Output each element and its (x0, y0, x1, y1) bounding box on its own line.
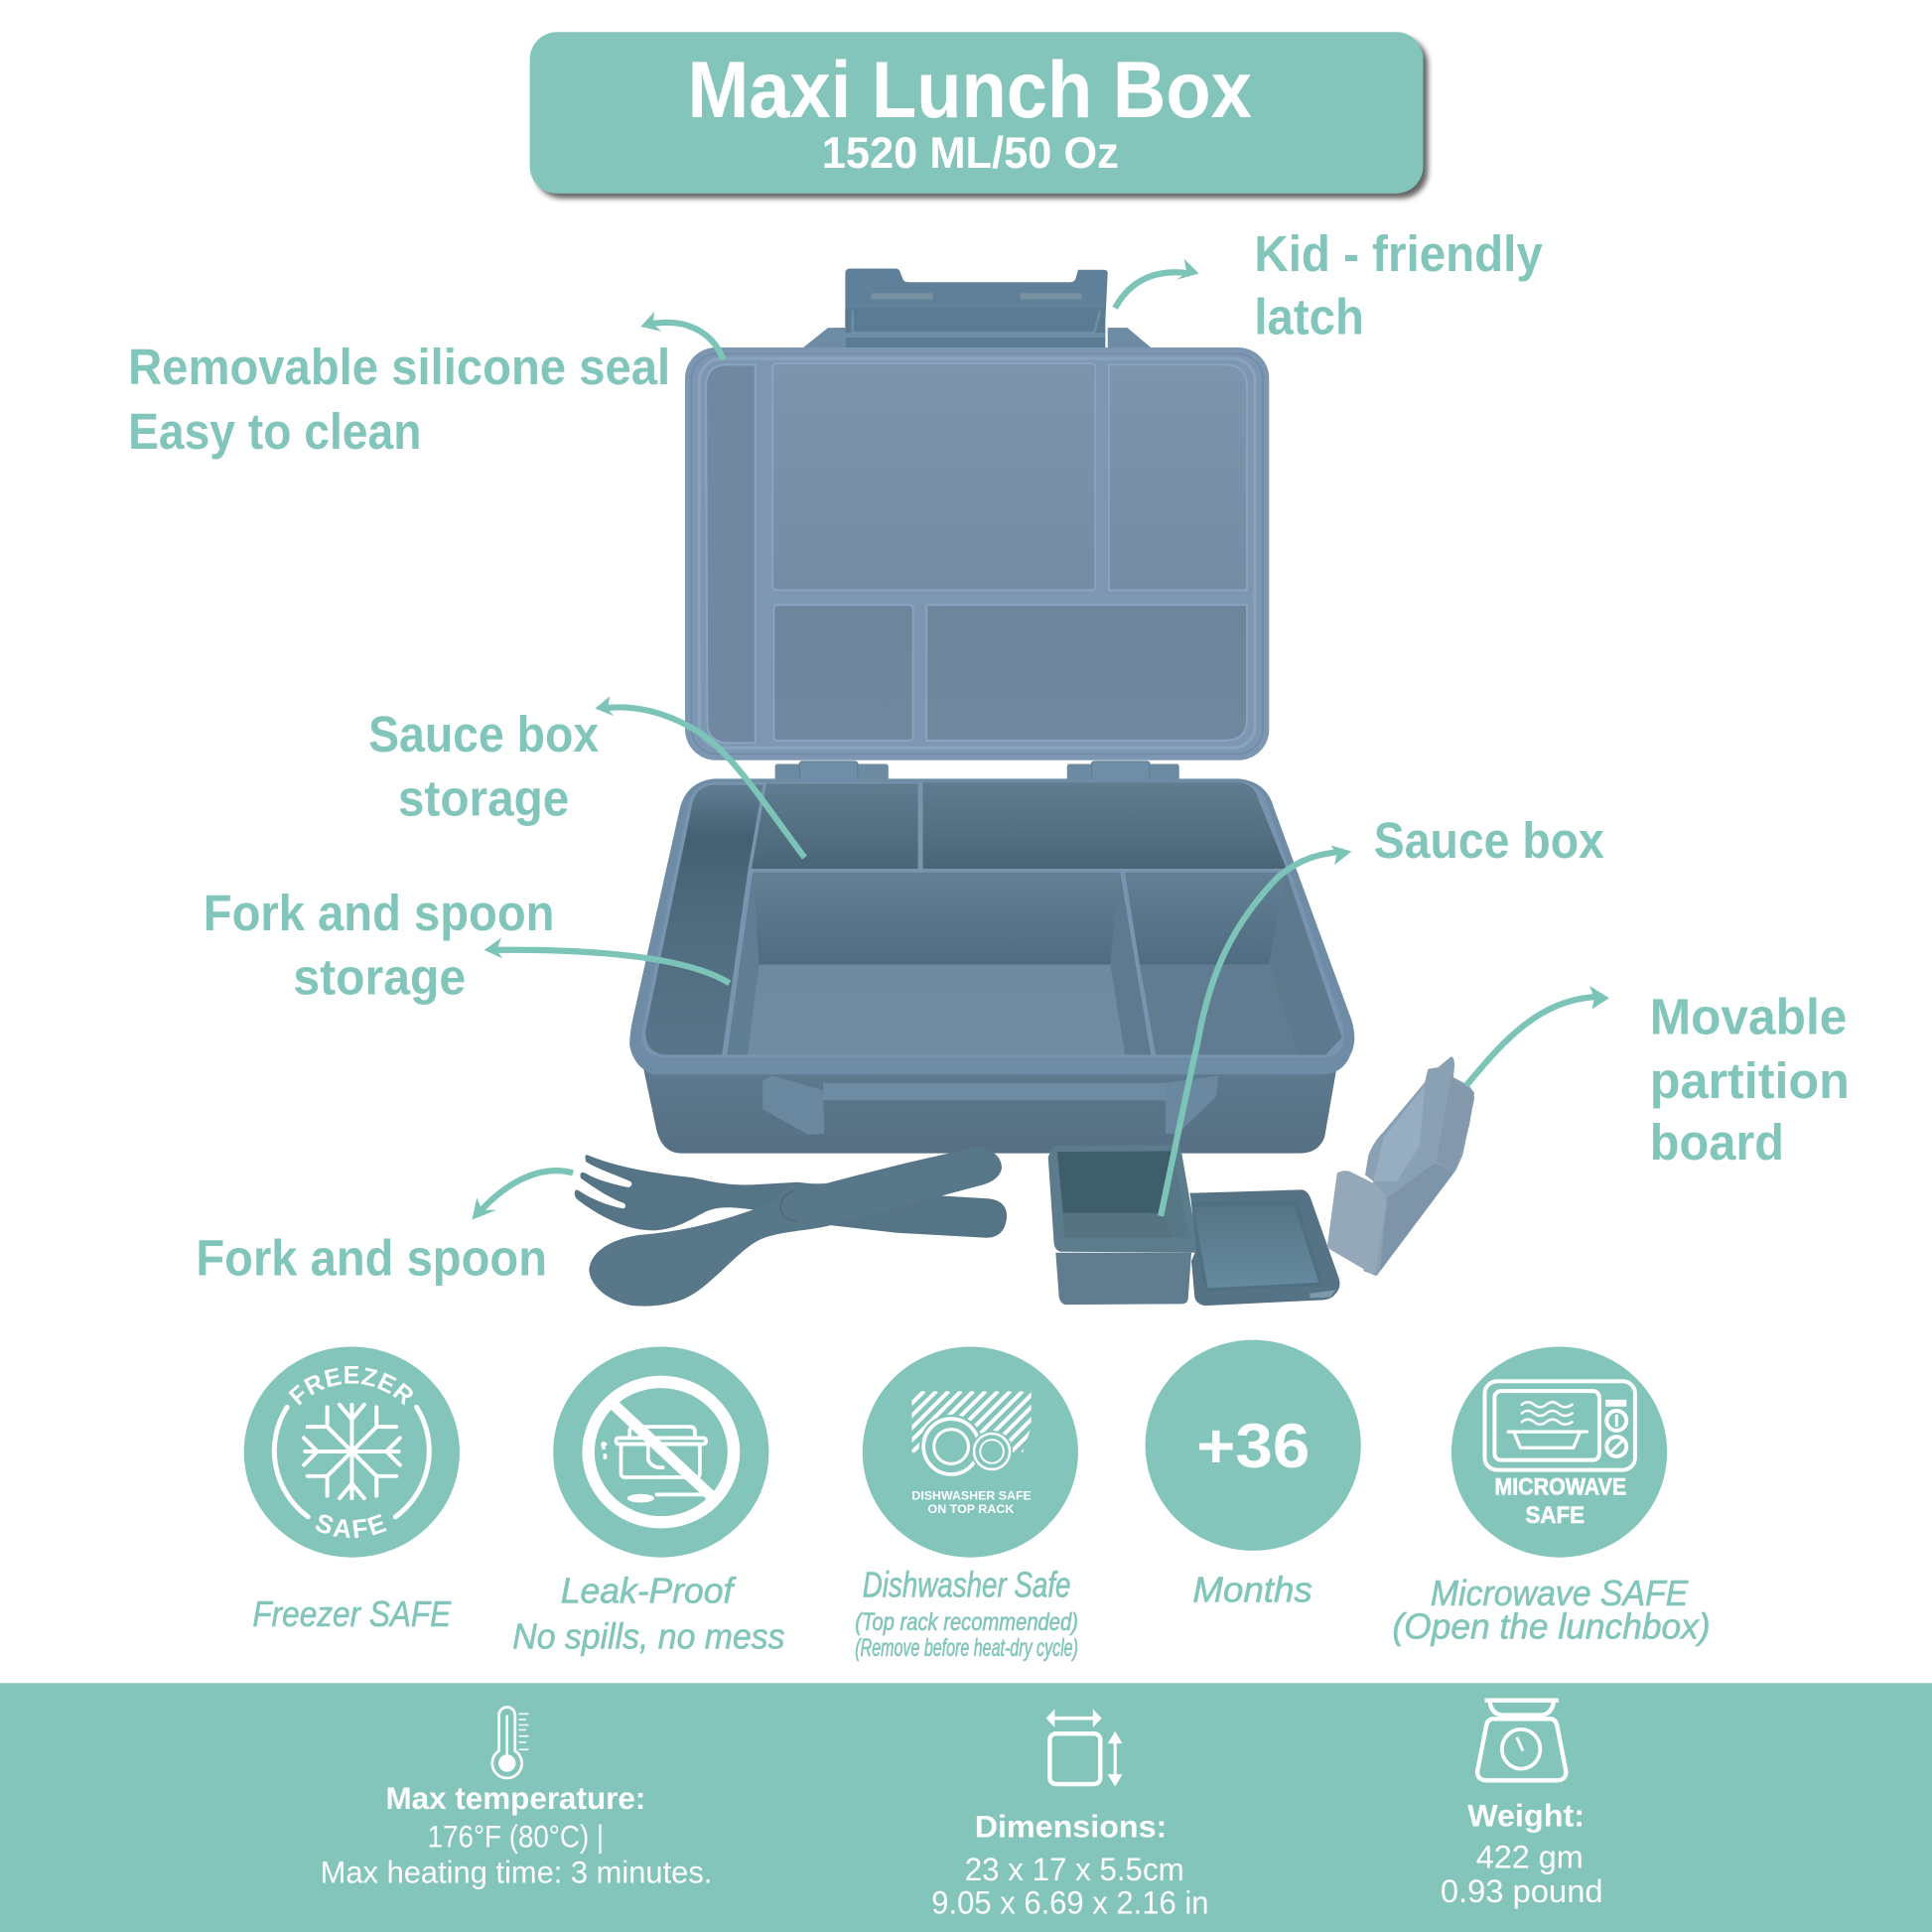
icon: thermometer (492, 1708, 528, 1778)
icon: microwave safe badge: MICROWAVE (1494, 1473, 1626, 1499)
arrow: silicone seal (640, 312, 724, 359)
text: dimensions: 23 x 17 x 5.5cm (965, 1852, 1184, 1887)
title banner: Maxi Lunch Box (688, 46, 1252, 135)
movable partition board (1327, 1056, 1474, 1276)
front latch bar (762, 1075, 1218, 1135)
text: dimensions: Dimensions: (975, 1809, 1167, 1844)
label: movable partition board: partition (1650, 1052, 1850, 1109)
title banner (530, 32, 1428, 199)
label: movable partition board: Movable (1650, 988, 1847, 1044)
caption: dishwasher safe: Dishwasher Safe (863, 1564, 1070, 1604)
label: sauce box: Sauce box (1374, 812, 1604, 869)
storage compartment, left (645, 785, 762, 1054)
label: removable silicone seal: Removable silicone seal (128, 339, 670, 395)
badge: +36 (1146, 1340, 1361, 1551)
text: weight: Weight: (1467, 1798, 1585, 1833)
label: kid-friendly latch (1254, 225, 1543, 345)
text: dimensions (931, 1809, 1208, 1920)
text: weight: 422 gm (1476, 1839, 1584, 1874)
arrow: sauce box (1161, 845, 1351, 1216)
text: max temperature (321, 1781, 712, 1889)
label: removable silicone seal: Easy to clean (128, 403, 421, 460)
text: dimensions: 9.05 x 6.69 x 2.16 in (931, 1884, 1208, 1920)
caption: microwave safe: Microwave SAFE (1431, 1573, 1689, 1613)
arrow: latch (1115, 259, 1199, 308)
icon: freezer safe badge: SAFE (316, 1514, 387, 1539)
caption: freezer safe: Freezer SAFE (252, 1593, 452, 1634)
label: sauce box storage: storage (398, 770, 569, 827)
panel: specifications band (0, 1683, 1932, 1932)
label: fork and spoon storage: Fork and spoon (204, 885, 554, 941)
title banner: 1520 ML/50 Oz (822, 129, 1119, 178)
right compartment (1125, 873, 1342, 1054)
caption: microwave safe: (Open the lunchbox) (1392, 1606, 1711, 1647)
caption: microwave safe (1392, 1573, 1711, 1647)
caption: months: Months (1192, 1569, 1312, 1609)
fork (575, 1155, 1007, 1238)
lunch box base (629, 761, 1354, 1154)
hinges (775, 761, 1179, 781)
text: max temperature: 176°F (80°C) | (428, 1819, 604, 1854)
sauce box (1048, 1145, 1339, 1306)
caption: dishwasher safe (855, 1564, 1078, 1662)
text: max temperature: Max temperature: (385, 1781, 645, 1816)
arrow: fork and spoon storage (484, 937, 730, 983)
icon: leak-proof badge (553, 1346, 768, 1558)
label: movable partition board (1650, 988, 1850, 1171)
lunch box lid, open (685, 269, 1269, 760)
arrow: movable partition (1466, 986, 1609, 1085)
label: removable silicone seal (128, 339, 670, 460)
caption: dishwasher safe: (Top rack recommended) (855, 1609, 1078, 1636)
text: weight: 0.93 pound (1441, 1873, 1603, 1909)
icon: freezer safe badge: FREEZER (288, 1366, 413, 1406)
icon: microwave safe badge: SAFE (1525, 1502, 1585, 1528)
label: sauce box storage (368, 706, 599, 827)
lid latch (845, 269, 1108, 347)
text: weight (1441, 1798, 1603, 1909)
icon: dishwasher safe badge (863, 1346, 1084, 1558)
badge: +36: +36 (1196, 1412, 1310, 1481)
icon: dishwasher safe badge: ON TOP RACK (928, 1502, 1014, 1516)
sauce box storage compartment (752, 783, 918, 869)
label: movable partition board: board (1650, 1114, 1784, 1171)
icon: freezer safe badge (244, 1346, 460, 1558)
spoon (589, 1148, 1002, 1307)
arrow: sauce box storage (595, 696, 804, 858)
label: fork and spoon storage: storage (293, 949, 466, 1006)
caption: dishwasher safe: (Remove before heat-dry cycle) (855, 1635, 1078, 1662)
sauce box lid (1189, 1189, 1339, 1306)
label: kid-friendly latch: Kid - friendly (1254, 225, 1543, 282)
icon: kitchen scale (1477, 1701, 1566, 1780)
top-right compartment (923, 782, 1287, 869)
caption: leak-proof (512, 1571, 785, 1657)
icon: microwave safe badge (1451, 1346, 1667, 1558)
caption: leak-proof: No spills, no mess (512, 1616, 785, 1657)
icon: dimensions (1046, 1709, 1123, 1787)
label: fork and spoon: Fork and spoon (196, 1230, 547, 1287)
main compartment (727, 873, 1151, 1054)
caption: leak-proof: Leak-Proof (561, 1571, 737, 1611)
icon: dishwasher safe badge: DISHWASHER SAFE (911, 1488, 1032, 1502)
label: sauce box storage: Sauce box (368, 706, 599, 762)
label: kid-friendly latch: latch (1254, 288, 1364, 345)
text: max temperature: Max heating time: 3 minutes. (321, 1855, 712, 1889)
arrow: fork and spoon (472, 1171, 573, 1220)
label: fork and spoon storage (204, 885, 554, 1006)
